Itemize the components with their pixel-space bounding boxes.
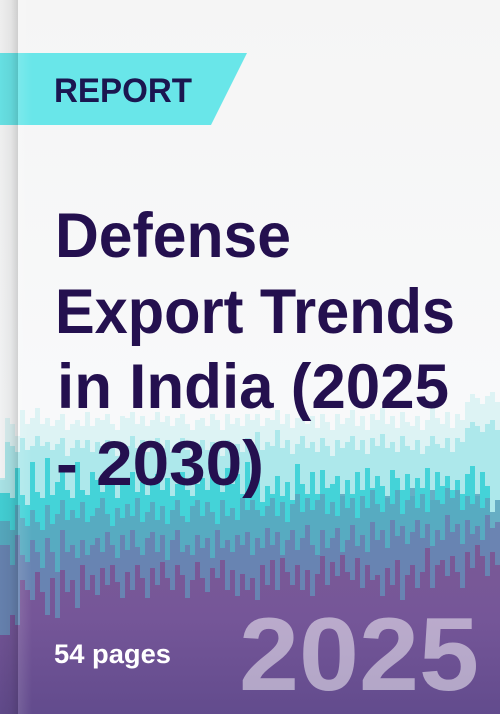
banner label: REPORT bbox=[54, 72, 192, 110]
report banner bbox=[0, 53, 247, 125]
title: Defense bbox=[55, 201, 291, 271]
title: Export Trends bbox=[55, 277, 455, 347]
page count: 54 pages bbox=[54, 639, 171, 669]
year: 2025 bbox=[239, 597, 479, 713]
title bbox=[55, 201, 455, 499]
title: in India (2025 bbox=[57, 352, 449, 422]
book spine shading bbox=[0, 0, 32, 714]
bar pattern bbox=[0, 392, 500, 714]
title: - 2030) bbox=[56, 429, 264, 499]
